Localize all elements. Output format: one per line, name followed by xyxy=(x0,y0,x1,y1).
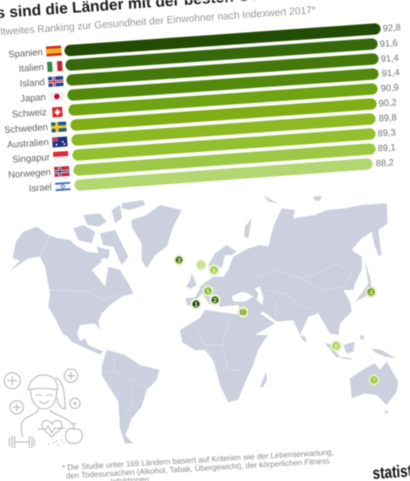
flag: Spanien xyxy=(46,45,62,56)
flag: Australien xyxy=(52,136,68,147)
value labels: 90,9 xyxy=(380,82,399,93)
map: Southeast Asia and Australia xyxy=(300,335,398,415)
country labels: Italien xyxy=(18,61,44,74)
icon: healthy person with plus signs, heart, dumbbell and apple xyxy=(4,369,82,448)
marker 10 xyxy=(238,307,248,317)
marker 2 xyxy=(210,295,220,305)
map: Africa xyxy=(180,310,268,402)
flag: Schweiz xyxy=(52,107,63,117)
country labels: Norwegen xyxy=(8,166,51,180)
country labels: Australien xyxy=(7,136,49,150)
marker 9 xyxy=(196,260,206,270)
value labels: 92,8 xyxy=(382,22,401,33)
value labels xyxy=(375,22,401,168)
map markers xyxy=(174,255,379,385)
value labels: 91,4 xyxy=(381,67,400,78)
value labels: 88,2 xyxy=(375,157,394,168)
icon: body and arm xyxy=(21,409,71,437)
marker 6 xyxy=(209,265,219,275)
bars xyxy=(70,29,375,185)
marker 7 xyxy=(369,375,379,385)
footnote: * Die Studie unter 169 Ländern basiert auf Kriterien wie der Lebenserwartung, xyxy=(62,448,334,472)
marker 1 xyxy=(191,299,201,309)
value labels: 91,4 xyxy=(380,53,399,64)
marker 8: 8 xyxy=(334,343,338,350)
marker 10: 10 xyxy=(239,309,247,316)
icon: plus circles xyxy=(4,369,80,414)
map: African borders xyxy=(195,315,245,370)
value labels: 89,1 xyxy=(377,142,396,153)
country labels: Japan xyxy=(20,91,46,104)
flag: Norwegen xyxy=(54,166,70,177)
flag: Island xyxy=(48,76,64,87)
marker 2: 2 xyxy=(213,297,217,304)
marker 9: 9 xyxy=(199,262,203,269)
country labels: Schweden xyxy=(4,121,48,135)
marker 5: 5 xyxy=(206,288,210,295)
bar chart xyxy=(4,22,401,194)
marker 3 xyxy=(174,255,184,265)
icon: head and hair xyxy=(28,375,65,409)
icon: apple xyxy=(66,424,82,443)
marker 5 xyxy=(203,286,213,296)
marker 6: 6 xyxy=(212,267,216,274)
flag: Japan xyxy=(49,91,65,102)
footnote: den Todesursachen (Alkohol, Tabak, Übergewicht), der körperlichen Fitness xyxy=(66,456,330,481)
value labels: 90,2 xyxy=(378,97,397,108)
icon: dots xyxy=(48,440,65,445)
map: US-Canada border xyxy=(40,236,117,300)
value labels: 91,6 xyxy=(379,38,398,49)
map: Eurasia xyxy=(185,195,388,335)
marker 3: 3 xyxy=(177,257,181,264)
country labels: Israel xyxy=(28,181,52,194)
marker 1: 1 xyxy=(194,301,198,308)
marker 4: 4 xyxy=(369,289,373,296)
country labels: Schweiz xyxy=(12,106,47,119)
world map xyxy=(10,195,398,443)
country labels: Singapur xyxy=(12,151,50,165)
flags xyxy=(46,45,71,192)
country labels xyxy=(4,46,52,194)
map: Central and South America xyxy=(65,334,159,443)
map: Caspian Sea xyxy=(254,287,263,305)
value labels: 89,3 xyxy=(377,127,396,138)
flag: Israel xyxy=(55,181,71,192)
marker 8 xyxy=(331,341,341,351)
icon: heart xyxy=(38,420,64,437)
marker 4 xyxy=(366,287,376,297)
map: South American borders xyxy=(103,357,147,422)
map: North America and Greenland xyxy=(10,200,197,335)
map: Madagascar xyxy=(260,372,267,387)
icon: dumbbell xyxy=(9,436,34,448)
flag: Italien xyxy=(47,61,63,72)
country labels: Spanien xyxy=(8,46,43,59)
country labels: Island xyxy=(19,76,45,89)
map: Black Sea xyxy=(232,292,253,302)
flag: Schweden xyxy=(51,121,67,132)
map: Asian borders xyxy=(252,263,352,322)
value labels: 89,8 xyxy=(378,112,397,123)
flag: Singapur xyxy=(53,151,69,162)
marker 7: 7 xyxy=(372,377,376,384)
